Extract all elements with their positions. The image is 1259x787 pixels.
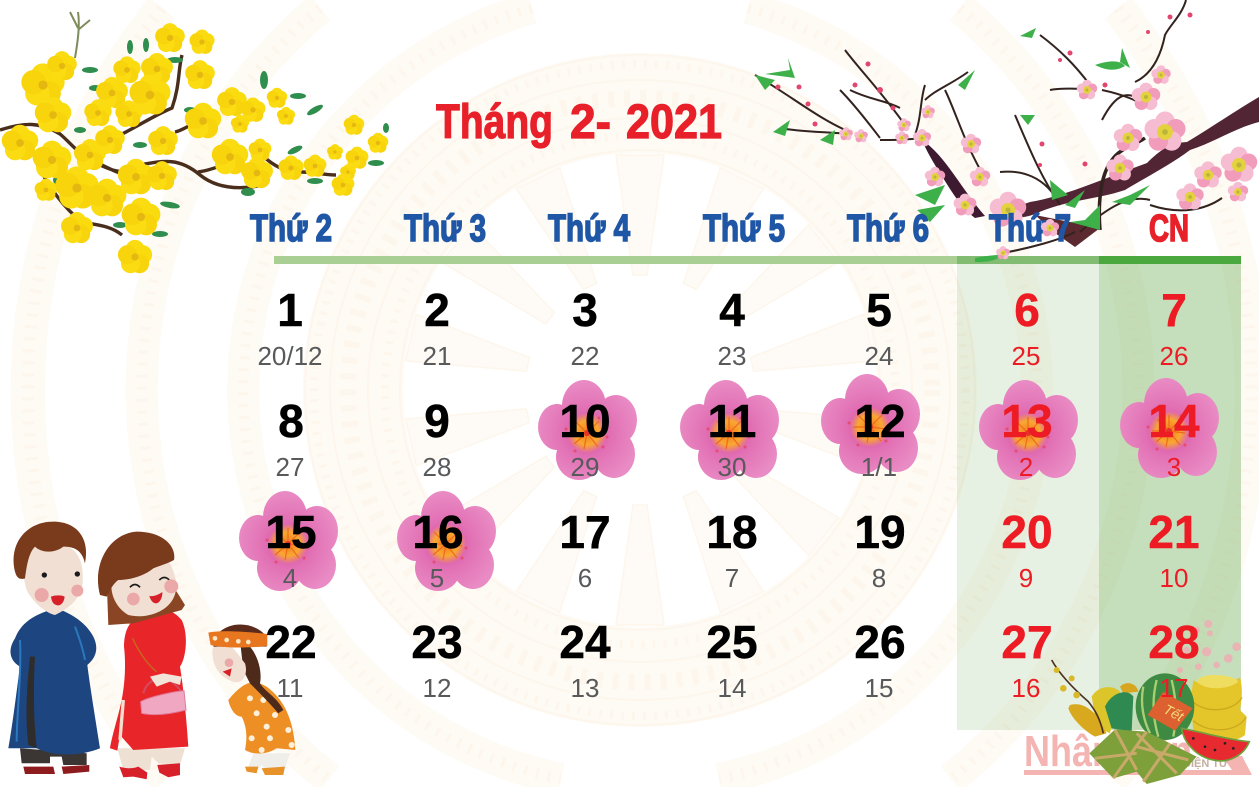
week 2: 30 — [718, 452, 746, 482]
week 2: 29 — [571, 452, 599, 482]
gold ingots — [1191, 675, 1247, 742]
family in ao dai — [8, 522, 295, 779]
week 3: 15 — [265, 506, 317, 558]
week 1 — [257, 284, 1188, 371]
banh chung — [1089, 729, 1197, 784]
week 2: 13 — [1001, 395, 1053, 447]
week 1: 4 — [719, 284, 745, 336]
week 2: 8 — [278, 395, 304, 447]
Saturday column — [957, 264, 1099, 730]
week 3: 21 — [1148, 506, 1200, 558]
week 2 — [276, 395, 1200, 482]
week 2: 3 — [1167, 452, 1181, 482]
Tet offerings: fruit and banh chung — [1052, 620, 1249, 784]
week 1: 25 — [1012, 341, 1040, 371]
weekday headers: Thứ 2 — [250, 208, 332, 250]
week 2: 10 — [559, 395, 611, 447]
watermark: Nhân Dân: ĐIỆN TỬ — [1183, 757, 1229, 770]
week 2: 27 — [276, 452, 304, 482]
week 4: 26 — [854, 616, 906, 668]
week 1: 7 — [1161, 284, 1187, 336]
Sunday column — [1099, 264, 1241, 730]
week 3: 10 — [1160, 563, 1188, 593]
week 4: 13 — [571, 673, 599, 703]
title: 2- — [570, 96, 611, 149]
watermark: Nhân Dân: Nhân Dân — [1024, 727, 1192, 776]
week 1: 1 — [277, 284, 303, 336]
girl bowing — [208, 625, 295, 775]
weekday headers: Thứ 5 — [703, 208, 785, 250]
week 3: 20 — [1001, 506, 1053, 558]
weekday headers: Thứ 7 — [989, 208, 1071, 250]
week 3: 17 — [559, 506, 611, 558]
week 3: 16 — [412, 506, 464, 558]
yellow apricot blossom branch — [0, 12, 389, 273]
week 2: 28 — [423, 452, 451, 482]
peach flower over Saturday header — [1041, 219, 1059, 236]
week 4: 24 — [559, 616, 611, 668]
man in blue robe — [8, 522, 100, 774]
week 1: 21 — [423, 341, 451, 371]
week 3: 6 — [578, 563, 592, 593]
week 1: 5 — [866, 284, 892, 336]
week 4: 14 — [718, 673, 746, 703]
watermelon — [1136, 673, 1194, 740]
week 1: 22 — [571, 341, 599, 371]
title: 2021 — [626, 96, 722, 149]
week 1: 20/12 — [257, 341, 323, 371]
yellow fruit and banana — [1092, 687, 1120, 733]
week 3 — [265, 506, 1200, 593]
weekday headers: Thứ 6 — [847, 208, 929, 250]
week 2: 1/1 — [861, 452, 897, 482]
week 4: 23 — [411, 616, 463, 668]
week 2: 14 — [1148, 395, 1200, 447]
week 2: 12 — [854, 395, 906, 447]
week 3: 9 — [1019, 563, 1033, 593]
week 4: 28 — [1148, 616, 1200, 668]
week 3: 18 — [706, 506, 758, 558]
woman in red robe — [98, 532, 188, 779]
weekday headers: CN — [1149, 208, 1189, 250]
watermelon slice — [1182, 728, 1249, 761]
week 3: 19 — [854, 506, 906, 558]
week 2: 11 — [708, 395, 756, 447]
date grid — [257, 284, 1200, 703]
weekday headers: Thứ 3 — [404, 208, 486, 250]
week 3: 8 — [872, 563, 886, 593]
week 4: 15 — [865, 673, 893, 703]
pink peach blossom branch — [755, 0, 1259, 262]
week 3: 7 — [725, 563, 739, 593]
holiday blossoms — [239, 374, 1219, 591]
week 4 — [265, 616, 1200, 703]
week 1: 26 — [1160, 341, 1188, 371]
header rule — [274, 256, 1241, 264]
week 4: 25 — [706, 616, 758, 668]
week 1: 23 — [718, 341, 746, 371]
Tet offerings: fruit and banh chung: Tết — [1161, 701, 1187, 725]
week 1: 2 — [424, 284, 450, 336]
weekday headers: Thứ 4 — [548, 208, 630, 250]
week 4: 12 — [423, 673, 451, 703]
peach sprig — [1177, 620, 1241, 673]
week 4: 22 — [265, 616, 317, 668]
week 4: 17 — [1160, 673, 1188, 703]
week 2: 9 — [424, 395, 450, 447]
week 1: 24 — [865, 341, 893, 371]
weekend columns — [957, 264, 1241, 730]
title: Tháng — [436, 96, 553, 149]
week 3: 4 — [283, 563, 297, 593]
week 2: 2 — [1019, 452, 1033, 482]
week 1: 3 — [572, 284, 598, 336]
weekday headers — [250, 208, 1189, 250]
week 4: 27 — [1001, 616, 1053, 668]
week 4: 16 — [1012, 673, 1040, 703]
week 1: 6 — [1014, 284, 1040, 336]
week 3: 5 — [430, 563, 444, 593]
red Tet tag — [1148, 692, 1193, 731]
week 4: 11 — [276, 673, 304, 703]
